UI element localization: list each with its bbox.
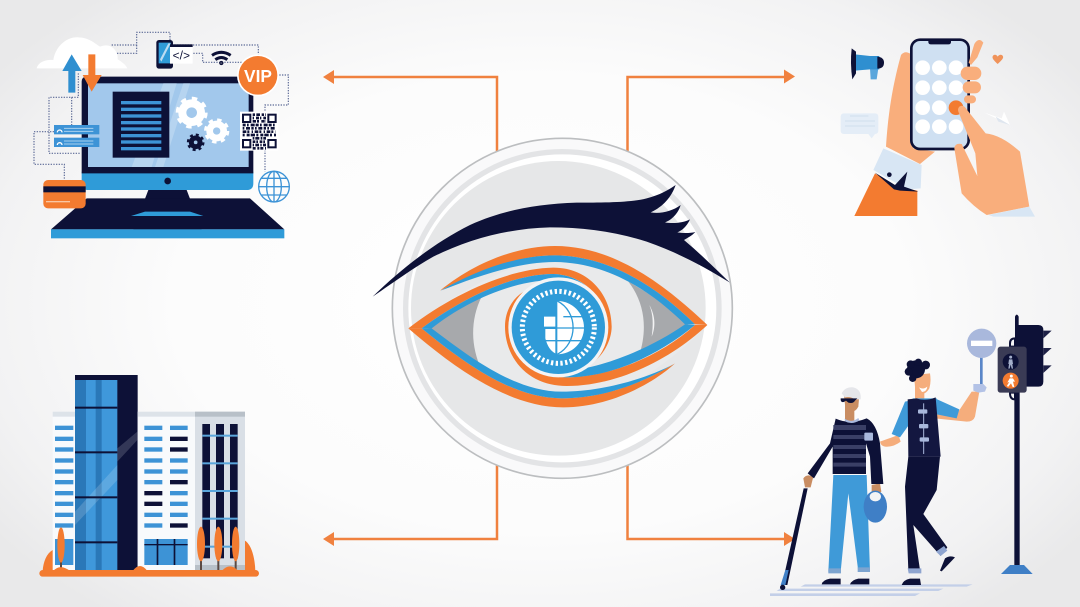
download arrow	[83, 54, 102, 92]
icon: guide helping blind person at crossing	[770, 315, 1052, 596]
icon: wifi	[212, 52, 231, 64]
trees and ground	[39, 527, 259, 577]
icon: office buildings	[39, 375, 259, 577]
left wing	[53, 412, 76, 570]
glass tower	[75, 375, 138, 570]
icon: globe	[259, 171, 289, 202]
ground stripes	[770, 584, 973, 596]
left hand and sleeve	[854, 52, 935, 216]
document on screen	[113, 92, 169, 158]
paper plane	[984, 112, 1010, 125]
lens circle	[392, 138, 732, 478]
handbag	[864, 491, 887, 523]
mobile and code tag: </>	[173, 49, 190, 63]
monitor	[51, 77, 284, 238]
gears	[178, 99, 228, 150]
arrow: top right	[628, 70, 795, 152]
dotted connectors	[34, 32, 288, 180]
arrow: bottom left	[323, 465, 497, 546]
eyelid swooshes	[408, 246, 707, 407]
eyebrow	[373, 185, 730, 297]
right wing	[195, 412, 245, 570]
QR code	[240, 112, 278, 151]
traffic light	[998, 315, 1052, 574]
VIP badge: VIP	[244, 66, 272, 86]
blind person with cane	[780, 387, 883, 590]
chat bubble	[841, 113, 878, 138]
credit card	[43, 180, 86, 208]
smartphone	[910, 38, 970, 150]
middle wing	[138, 412, 195, 570]
eyeball	[408, 257, 707, 403]
VIP badge	[237, 54, 279, 96]
central eye emblem	[373, 138, 732, 478]
icon: hands using smartphone	[841, 38, 1035, 217]
upload arrow	[62, 54, 82, 93]
iris with globe	[508, 277, 608, 377]
mobile and code tag	[156, 40, 193, 69]
icon: computer with digital services	[34, 32, 289, 238]
megaphone	[851, 48, 884, 79]
arrow: bottom right	[628, 465, 795, 546]
user list cards	[54, 125, 99, 147]
arrow: top left	[323, 70, 497, 152]
cloud	[37, 37, 127, 68]
left hand fingers	[961, 40, 983, 103]
stop sign paddle	[967, 329, 996, 385]
right hand pointing	[954, 106, 1035, 217]
heart	[993, 55, 1003, 64]
guide person	[880, 359, 987, 585]
